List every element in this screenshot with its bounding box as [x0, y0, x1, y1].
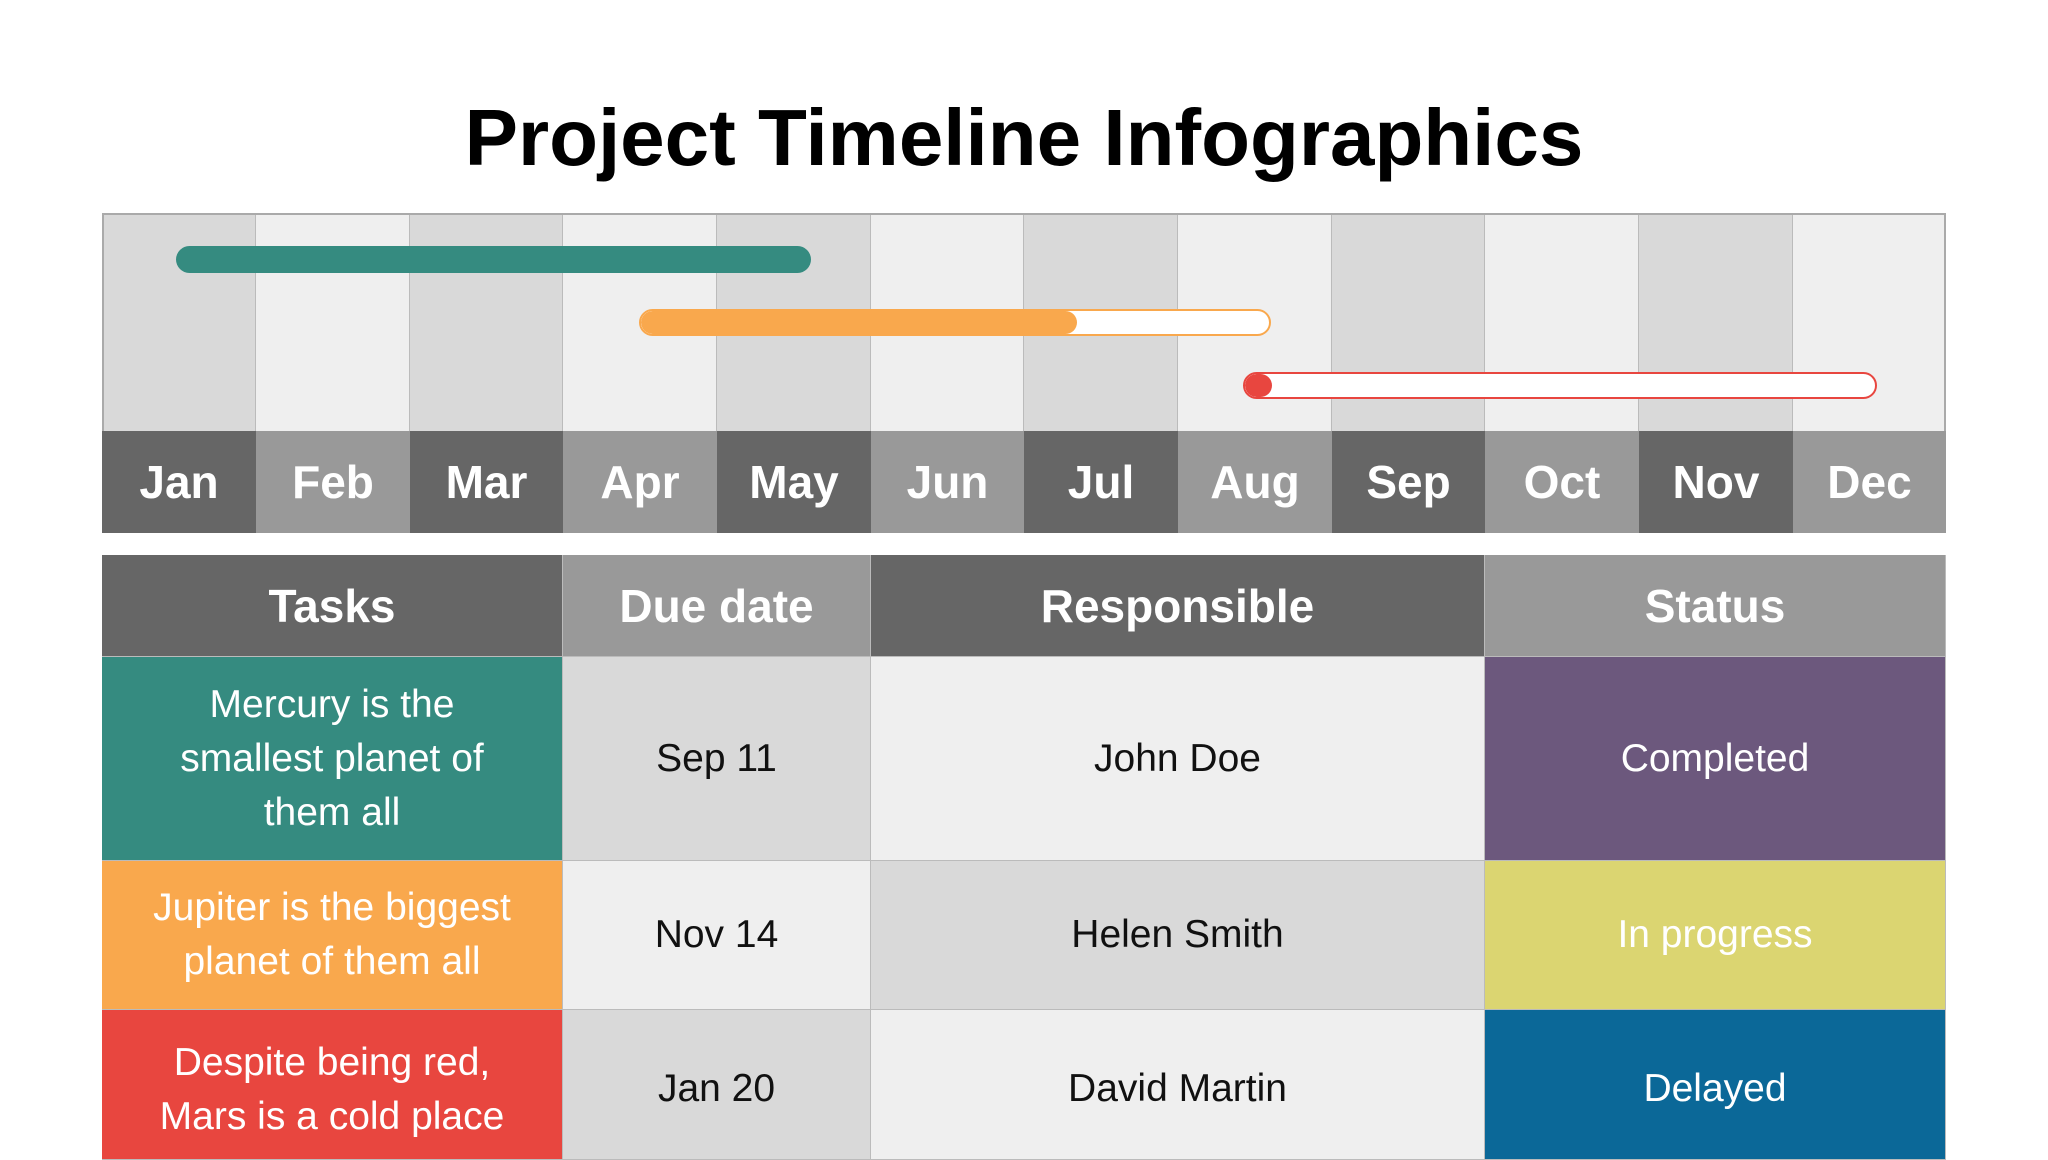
row 1 — [102, 657, 1946, 861]
bar: teal task — [176, 246, 811, 273]
gantt chart: Jul — [1068, 456, 1134, 508]
month labels — [102, 431, 1946, 533]
row 2 — [102, 861, 1946, 1010]
table: Completed — [1621, 736, 1809, 780]
gantt chart: Oct — [1524, 456, 1600, 508]
gantt chart: May — [749, 456, 839, 508]
table: Despite being red, — [174, 1041, 490, 1084]
table: John Doe — [1094, 736, 1261, 780]
gantt chart: Dec — [1827, 456, 1912, 508]
table header — [102, 555, 1946, 657]
gantt chart: Jun — [907, 456, 988, 508]
table: Tasks — [268, 580, 396, 632]
bar: orange task — [639, 309, 1271, 336]
title: Project Timeline Infographics — [465, 93, 1583, 182]
gantt chart: Apr — [600, 456, 680, 508]
row 3 — [102, 1010, 1946, 1160]
gantt chart: Nov — [1673, 456, 1759, 508]
gantt chart: Feb — [292, 456, 374, 508]
table — [102, 555, 1946, 1160]
gantt chart: Sep — [1366, 456, 1451, 508]
table: Mercury is the — [210, 682, 454, 726]
table: In progress — [1617, 913, 1813, 956]
table: smallest planet of — [180, 736, 484, 780]
table: Delayed — [1643, 1067, 1787, 1110]
gantt chart: Jan — [139, 456, 219, 508]
table: Jupiter is the biggest — [153, 886, 511, 929]
table: Helen Smith — [1071, 913, 1284, 956]
table: planet of them all — [183, 940, 480, 983]
table: them all — [264, 790, 400, 834]
table: Nov 14 — [655, 913, 778, 956]
gantt chart — [102, 213, 1946, 533]
table: Sep 11 — [656, 736, 777, 780]
table: David Martin — [1068, 1067, 1287, 1110]
table: Status — [1645, 580, 1785, 632]
gantt chart: Aug — [1210, 456, 1300, 508]
table: Due date — [619, 580, 814, 632]
table: Jan 20 — [658, 1067, 775, 1110]
gantt chart: Mar — [446, 456, 527, 508]
table: Responsible — [1041, 580, 1314, 632]
bar: red task — [1243, 372, 1877, 399]
table: Mars is a cold place — [160, 1095, 504, 1138]
